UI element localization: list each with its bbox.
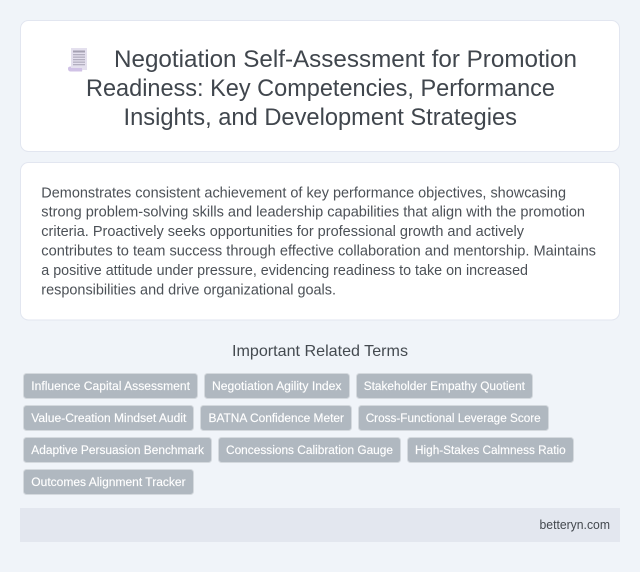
chip: High-Stakes Calmness Ratio [408,438,574,462]
chip: Value-Creation Mindset Audit [24,406,194,430]
chip: Negotiation Agility Index [204,374,350,398]
description text: responsibilities and drive organizational goals. [41,282,336,298]
icon: paper scroll [68,48,87,72]
chip: High-Stakes Calmness Ratio: High-Stakes Calmness Ratio [415,443,566,457]
chip: Influence Capital Assessment [24,374,198,398]
chip: Negotiation Agility Index: Negotiation Agility Index [212,379,342,393]
term chips [24,374,574,494]
chip: Adaptive Persuasion Benchmark: Adaptive Persuasion Benchmark [31,443,205,457]
description text: criteria. Proactively seeks opportunities for professional growth and actively [41,224,525,240]
chip: Concessions Calibration Gauge [218,438,400,462]
description text: contributes to team success through effective collaboration and mentorship. Maintains [41,243,596,259]
chip: Concessions Calibration Gauge: Concessions Calibration Gauge [226,443,393,457]
chip: Stakeholder Empathy Quotient [356,374,532,398]
description text: strong problem-solving skills and leadership capabilities that align with the promotion [41,205,585,221]
chip: Outcomes Alignment Tracker [24,470,194,494]
heading: related terms: Important Related Terms [232,343,408,360]
description text [41,185,596,298]
title: Negotiation Self-Assessment for Promotion [114,46,577,73]
description text: Demonstrates consistent achievement of key performance objectives, showcasing [41,185,566,201]
chip: Value-Creation Mindset Audit: Value-Creation Mindset Audit [31,411,187,425]
panel: description [20,162,620,320]
panel: title card [20,20,620,152]
description text: a positive attitude under pressure, evidencing readiness to take on increased [41,263,528,279]
title: Insights, and Development Strategies [124,104,517,131]
chip: BATNA Confidence Meter [200,406,352,430]
chip: Outcomes Alignment Tracker: Outcomes Alignment Tracker [31,475,186,489]
footer source text: betteryn.com [540,517,610,532]
chip: Cross-Functional Leverage Score: Cross-Functional Leverage Score [366,411,541,425]
chip: Stakeholder Empathy Quotient: Stakeholder Empathy Quotient [364,379,526,393]
chip: Adaptive Persuasion Benchmark [24,438,212,462]
title [86,46,577,131]
chip: Cross-Functional Leverage Score [358,406,548,430]
footer [20,508,620,542]
chip: Influence Capital Assessment: Influence Capital Assessment [31,379,191,393]
title: Readiness: Key Competencies, Performance [86,75,555,102]
chip: BATNA Confidence Meter: BATNA Confidence Meter [208,411,344,425]
